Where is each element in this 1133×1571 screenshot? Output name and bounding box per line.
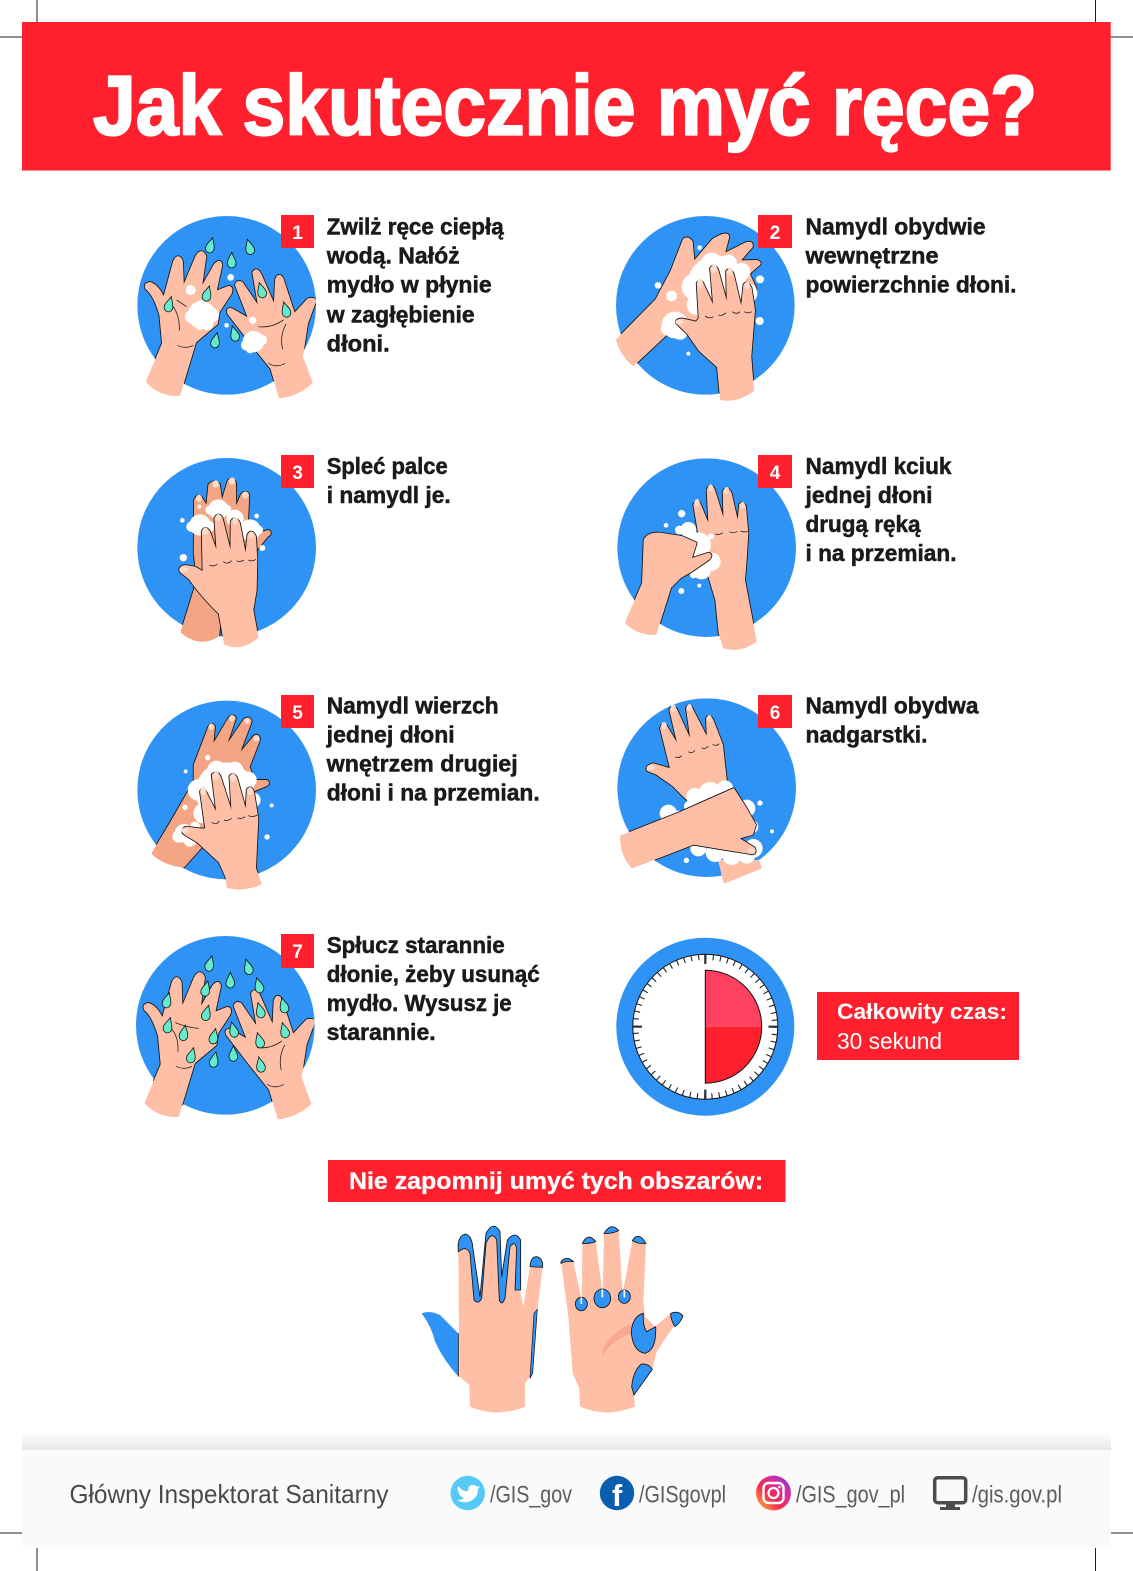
callout: total time: Całkowity czas: [837,999,1007,1024]
step 4 text: jednej dłoni [805,482,932,508]
step 3 [137,453,451,646]
step 7 text: dłonie, żeby usunąć [327,961,540,987]
step 7 text: Spłucz starannie [327,932,505,958]
title banner: Jak skutecznie myć ręce? [93,58,1037,152]
number badge 2: 2 [770,223,780,244]
number badge 2 [758,215,792,248]
number badge 3 [281,455,314,488]
step 2 [616,214,1016,399]
twitter handle: /GIS_gov [490,1482,572,1508]
number badge 1 [281,215,314,248]
illustration: washing thumb [617,458,796,649]
step 1 [137,214,504,397]
organisation name: Główny Inspektorat Sanitarny [70,1479,388,1509]
illustration: interlaced fingers [137,458,316,646]
website address: /gis.gov.pl [972,1482,1062,1508]
back of hand [422,1226,543,1412]
illustration: wrists [617,698,796,882]
number badge 5 [281,695,314,728]
step 4 text: i na przemian. [806,540,956,566]
twitter [450,1476,572,1510]
step 6 text [806,692,979,748]
step 1 text: wodą. Nałóż [326,242,460,268]
footer [22,1432,1111,1548]
step 7 text: mydło. Wysusz je [327,990,512,1016]
instagram handle: /GIS_gov_pl [796,1482,905,1508]
diagram: commonly missed hand areas [422,1226,683,1412]
step 1 text: w zagłębienie [326,302,475,328]
illustration: rinsing hands [136,936,315,1118]
step 5 text: Namydl wierzch [327,692,499,718]
instagram [756,1476,905,1510]
step 4 text: drugą ręką [806,511,921,537]
callout: total time: 30 sekund [837,1028,942,1054]
step 7 text [327,932,540,1045]
number badge 1: 1 [292,223,303,244]
callout: total time [817,992,1019,1060]
illustration: back of hand [137,701,316,888]
step 3 text: Spleć palce [327,453,448,479]
step 1 text: Zwilż ręce ciepłą [327,214,504,240]
step 2 text: powierzchnie dłoni. [806,272,1016,298]
number badge 7: 7 [292,942,303,963]
illustration: wet hands with soap [137,216,316,397]
facebook: f [612,1478,623,1513]
number badge 6 [758,695,792,728]
number badge 3: 3 [292,463,303,484]
facebook [600,1476,726,1513]
step 2 text: Namydl obydwie [806,214,986,240]
step 7 text: starannie. [327,1019,436,1045]
number badge 7 [281,934,314,968]
step 4 [617,453,956,649]
number badge 4 [758,455,792,488]
title banner [22,22,1111,170]
step 1 text [326,214,504,357]
website [935,1478,1062,1510]
timer icon [616,938,794,1116]
step 3 text [327,453,451,508]
step 5 text: jednej dłoni [326,722,455,748]
number badge 5: 5 [292,703,303,724]
step 4 text: Namydl kciuk [806,453,952,479]
step 6 text: nadgarstki. [806,722,928,748]
step 5 [137,692,540,888]
number badge 6: 6 [770,703,780,724]
heading: areas to wash [328,1160,786,1202]
step 2 text: wewnętrzne [804,242,938,268]
step 5 text: wnętrzem drugiej [326,750,518,776]
illustration: palm on palm [616,216,795,399]
step 6 text: Namydl obydwa [806,692,979,718]
step 5 text: dłoni i na przemian. [327,780,540,806]
step 1 text: dłoni. [327,331,390,357]
number badge 4: 4 [770,463,781,484]
step 6 [617,692,979,882]
step 1 text: mydło w płynie [327,272,492,298]
step 2 text [804,214,1016,298]
heading: areas to wash: Nie zapomnij umyć tych obszarów: [349,1168,763,1195]
palm of hand [561,1227,683,1412]
facebook handle: /GISgovpl [639,1482,726,1508]
step 7 [136,932,540,1118]
step 5 text [326,692,540,806]
step 3 text: i namydl je. [327,482,451,508]
step 4 text [805,453,956,566]
